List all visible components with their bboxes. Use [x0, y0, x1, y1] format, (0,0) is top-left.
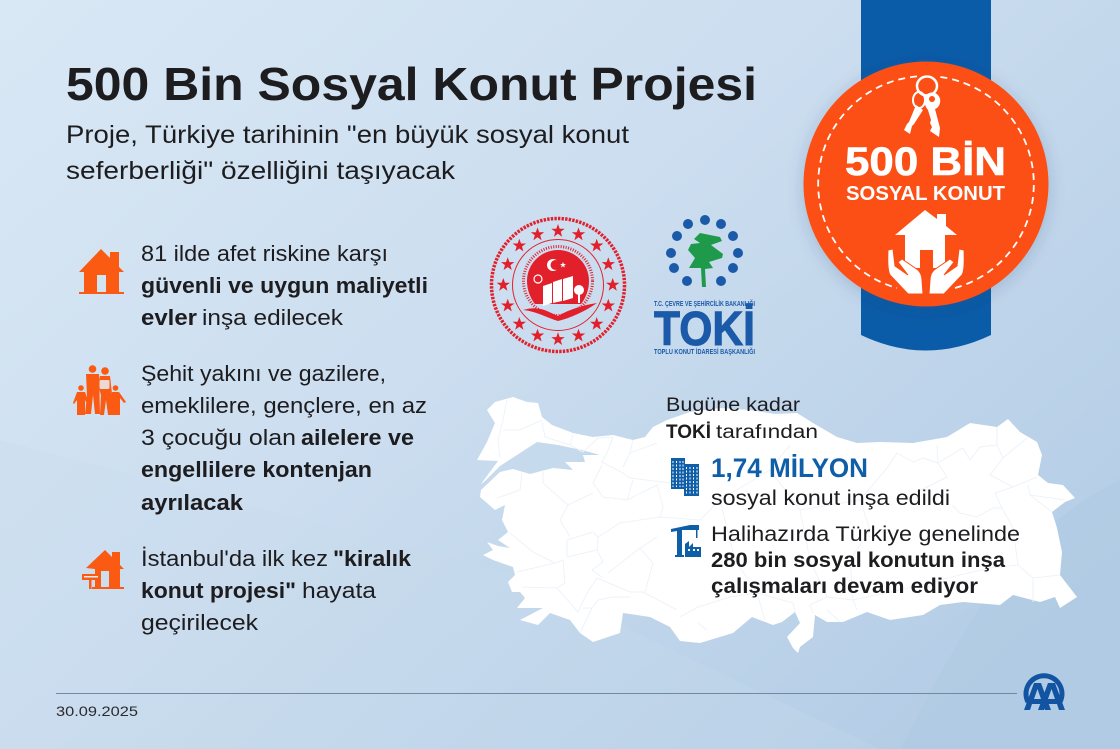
icon: crane [671, 525, 701, 557]
icon: buildings [671, 458, 699, 496]
text: quota: emeklilere, gençlere, en az [141, 393, 427, 418]
logo: TOKİ: TOPLU KONUT İDARESİ BAŞKANLIĞI [654, 347, 755, 356]
text: quota: engellilere kontenjan [141, 457, 372, 482]
dashed ring [818, 76, 1034, 288]
logo: TOKİ: TOKİ [654, 303, 755, 356]
logo: AA [1024, 676, 1065, 710]
icon: house [79, 249, 124, 294]
subtitle: Proje, Türkiye tarihinin "en büyük sosyal konut [66, 121, 629, 149]
icon: house in hands [888, 210, 964, 294]
text: 280 bin under construction [711, 523, 1020, 598]
text: rental: hayata [302, 578, 377, 603]
text: housing: inşa edilecek [202, 305, 344, 330]
ribbon [861, 0, 991, 350]
text: rental: konut projesi" [141, 578, 296, 603]
date: 30.09.2025 [56, 703, 138, 719]
text: rental: "kiralık [333, 546, 412, 571]
text: rental: geçirilecek [141, 610, 259, 635]
map: Turkey [477, 397, 1077, 653]
text: 280 bin under construction: 280 bin sosyal konutun inşa [711, 549, 1005, 572]
stat: 1,74 milyon: 1,74 MİLYON [711, 453, 868, 483]
text: housing: evler [141, 305, 197, 330]
text: quota: 3 çocuğu olan [141, 425, 296, 450]
text: housing: güvenli ve uygun maliyetli [141, 273, 428, 298]
text: housing: 81 ilde afet riskine karşı [141, 241, 388, 266]
text: housing [141, 241, 428, 330]
subtitle: seferberliği" özelliğini taşıyacak [66, 157, 456, 185]
title: 500 Bin Sosyal Konut Projesi [66, 58, 757, 110]
text: rental [141, 546, 412, 635]
stat: 1,74 milyon: sosyal konut inşa edildi [711, 487, 950, 510]
text: 280 bin under construction: Halihazırda Türkiye genelinde [711, 523, 1020, 546]
logo: TOKİ [654, 215, 755, 356]
logo: ministry emblem [492, 218, 624, 352]
text: so far by TOKİ: TOKİ [666, 422, 711, 443]
text: quota: Şehit yakını ve gazilere, [141, 361, 386, 386]
text: so far by TOKİ [666, 395, 818, 443]
subtitle [66, 121, 629, 185]
logo: TOKİ: T.C. ÇEVRE VE ŞEHİRCİLİK BAKANLIĞI [654, 299, 755, 308]
icon: keys [904, 76, 940, 137]
text: so far by TOKİ: Bugüne kadar [666, 395, 801, 416]
text: 280 bin under construction: çalışmaları devam ediyor [711, 575, 978, 598]
badge: 500 bin sosyal konut [804, 62, 1048, 306]
badge: 500 bin sosyal konut: SOSYAL KONUT [846, 183, 1005, 205]
text: so far by TOKİ: tarafından [716, 422, 818, 443]
icon: rental house [82, 550, 124, 589]
text: quota: ayrılacak [141, 490, 244, 515]
stat: 1,74 milyon [711, 453, 950, 510]
text: quota [141, 361, 427, 515]
badge text: 500 BİN [845, 140, 1006, 184]
text: quota: ailelere ve [301, 425, 414, 450]
text: rental: İstanbul'da ilk kez [141, 546, 328, 571]
icon: family [73, 365, 126, 415]
